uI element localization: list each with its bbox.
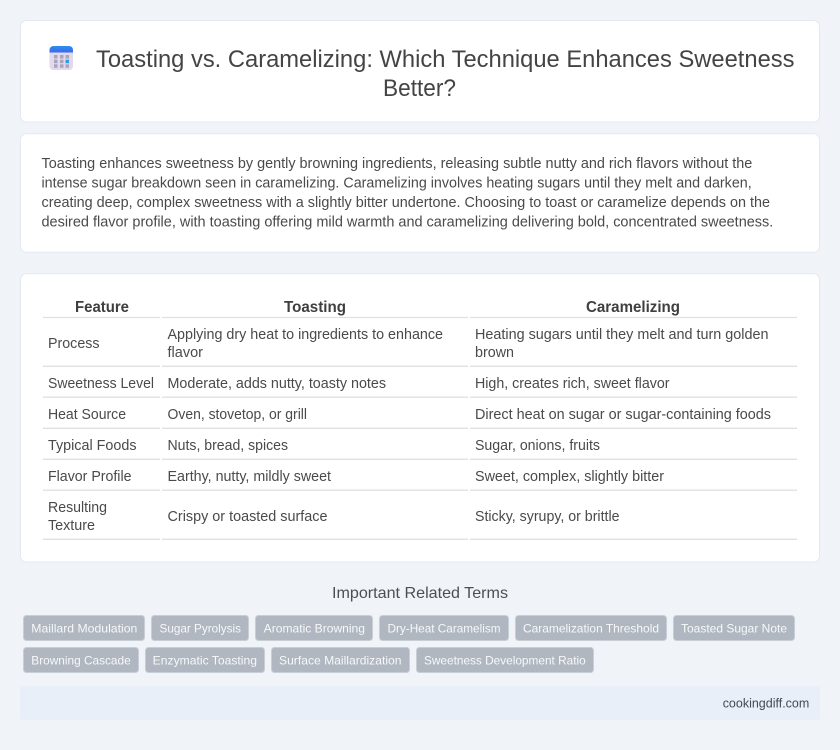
panel: summary xyxy=(20,134,820,252)
row: heat source: Oven, stovetop, or grill xyxy=(168,407,307,423)
footer source text: cookingdiff.com xyxy=(723,695,809,710)
row: resulting texture: Texture xyxy=(48,518,95,534)
tag: Browning Cascade: Browning Cascade xyxy=(31,653,131,667)
tag: Dry-Heat Caramelism xyxy=(380,616,508,640)
row: typical foods: Sugar, onions, fruits xyxy=(475,438,600,454)
icon: calendar xyxy=(50,46,73,70)
summary text: Toasting enhances sweetness by gently browning ingredients, releasing subtle nutty and rich flavors without the xyxy=(42,156,752,172)
row: sweetness level: Sweetness Level xyxy=(48,376,154,392)
panel: comparison table xyxy=(20,274,820,562)
title: Better? xyxy=(383,75,456,102)
row: process: Heating sugars until they melt and turn golden xyxy=(475,327,768,343)
row: typical foods: Typical Foods xyxy=(48,438,136,454)
tag: Aromatic Browning: Aromatic Browning xyxy=(264,621,365,635)
row: process: Process xyxy=(48,336,100,352)
row: process: brown xyxy=(475,345,514,361)
row: sweetness level: Moderate, adds nutty, toasty notes xyxy=(168,376,386,392)
related term tags xyxy=(24,616,794,672)
table header: Caramelizing xyxy=(586,299,680,316)
tag: Dry-Heat Caramelism: Dry-Heat Caramelism xyxy=(388,621,500,635)
row: typical foods xyxy=(48,438,600,454)
tag: Sweetness Development Ratio: Sweetness Development Ratio xyxy=(424,653,586,667)
panel: title card xyxy=(20,20,820,122)
summary text: creating deep, complex sweetness with a slightly bitter undertone. Choosing to toast or caramelize depends on the xyxy=(42,195,770,211)
tag: Aromatic Browning xyxy=(256,616,372,640)
tag: Sugar Pyrolysis: Sugar Pyrolysis xyxy=(160,621,241,635)
table header xyxy=(75,299,680,316)
summary text: intense sugar breakdown seen in caramelizing. Caramelizing involves heating sugars until they melt and darken, xyxy=(42,176,752,192)
row: typical foods: Nuts, bread, spices xyxy=(168,438,288,454)
heading: related terms: Important Related Terms xyxy=(332,585,508,602)
tag: Toasted Sugar Note: Toasted Sugar Note xyxy=(681,621,787,635)
row: flavor profile xyxy=(48,469,664,485)
row: heat source xyxy=(48,407,771,423)
row: resulting texture: Resulting xyxy=(48,500,107,516)
row: flavor profile: Sweet, complex, slightly bitter xyxy=(475,469,664,485)
row: resulting texture xyxy=(48,500,620,534)
summary text: desired flavor profile, with toasting offering mild warmth and caramelizing delivering bold, concentrated sweetness. xyxy=(42,214,773,230)
title: Toasting vs. Caramelizing: Which Technique Enhances Sweetness xyxy=(96,46,794,73)
row: process: Applying dry heat to ingredients to enhance xyxy=(168,327,443,343)
row: sweetness level: High, creates rich, sweet flavor xyxy=(475,376,670,392)
row: process: flavor xyxy=(168,345,203,361)
row: resulting texture: Crispy or toasted surface xyxy=(168,509,328,525)
tag: Surface Maillardization xyxy=(272,648,410,672)
summary text xyxy=(42,156,773,230)
tag: Surface Maillardization: Surface Maillardization xyxy=(279,653,402,667)
row: heat source: Heat Source xyxy=(48,407,126,423)
row: heat source: Direct heat on sugar or sugar-containing foods xyxy=(475,407,771,423)
footer xyxy=(20,686,820,720)
tag: Sweetness Development Ratio xyxy=(416,648,594,672)
tag: Browning Cascade xyxy=(24,648,138,672)
table header: Toasting xyxy=(284,299,346,316)
title xyxy=(96,46,794,102)
row: sweetness level xyxy=(48,376,670,392)
row: resulting texture: Sticky, syrupy, or brittle xyxy=(475,509,620,525)
tag: Enzymatic Toasting: Enzymatic Toasting xyxy=(153,653,257,667)
tag: Toasted Sugar Note xyxy=(674,616,794,640)
tag: Caramelization Threshold: Caramelization Threshold xyxy=(523,621,659,635)
tag: Maillard Modulation: Maillard Modulation xyxy=(31,621,137,635)
row: process xyxy=(48,327,768,361)
tag: Sugar Pyrolysis xyxy=(152,616,248,640)
tag: Enzymatic Toasting xyxy=(146,648,264,672)
row: flavor profile: Flavor Profile xyxy=(48,469,132,485)
tag: Caramelization Threshold xyxy=(516,616,666,640)
row: flavor profile: Earthy, nutty, mildly sweet xyxy=(168,469,331,485)
tag: Maillard Modulation xyxy=(24,616,144,640)
table header: Feature xyxy=(75,299,129,316)
